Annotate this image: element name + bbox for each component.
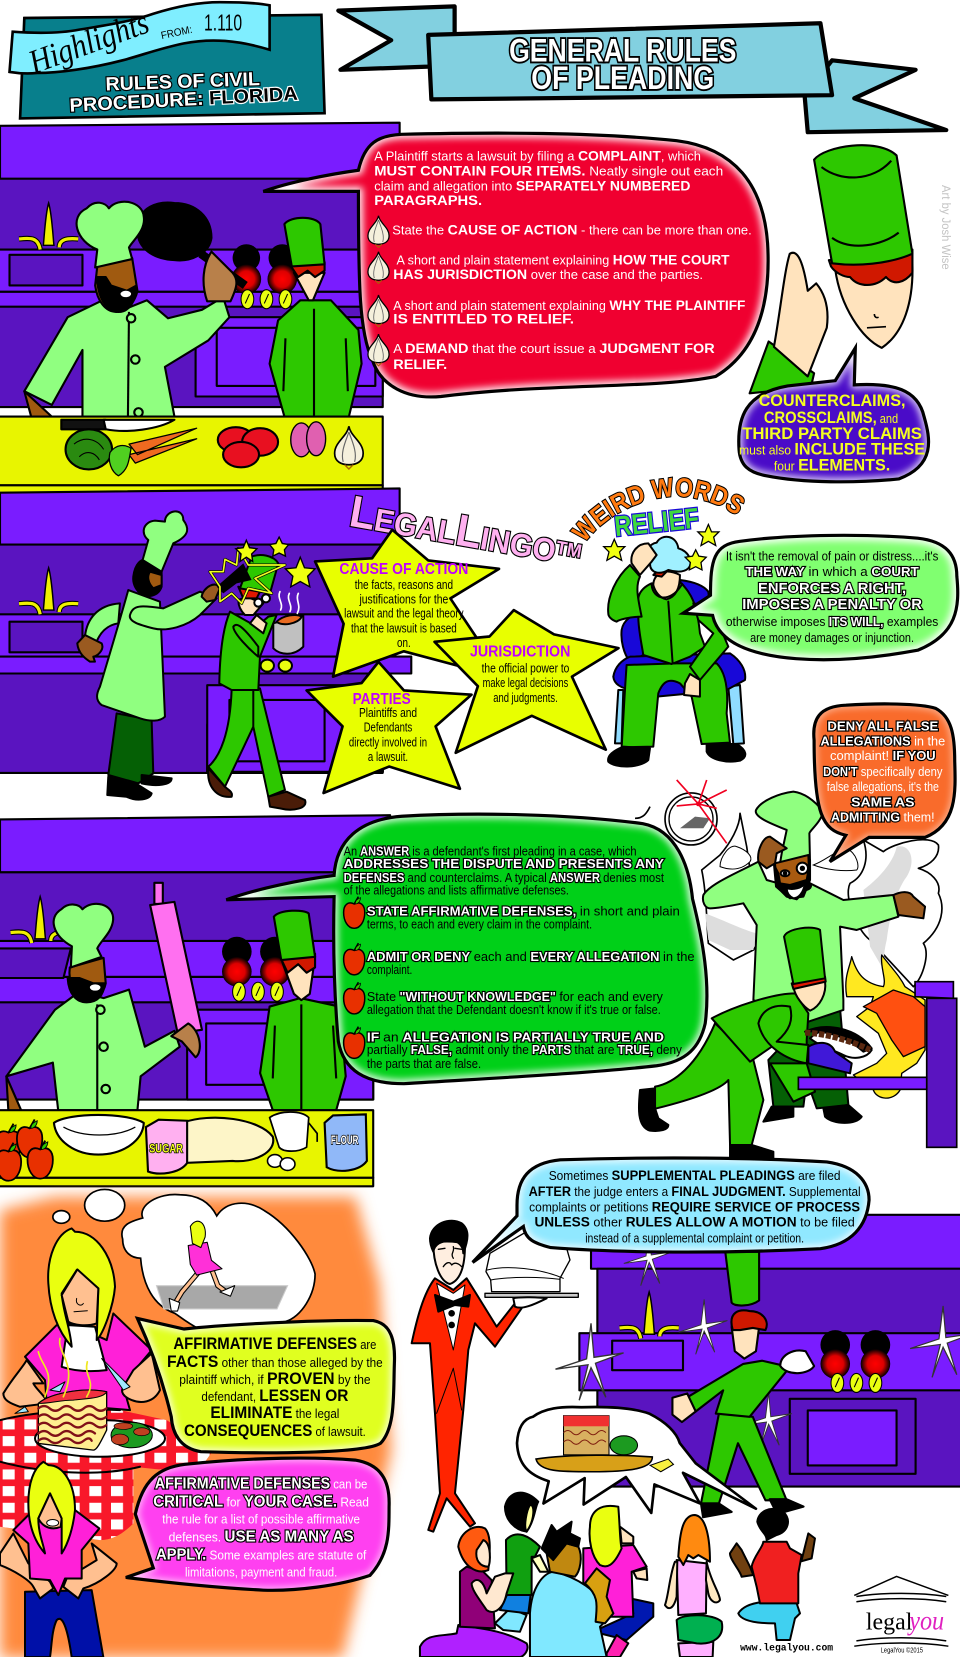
scene: burning oven [635,780,957,1160]
callout: complaint requirements [263,133,768,397]
callout: supplemental pleadings [473,1158,869,1262]
bubble text: DENY ALL FALSE [827,720,938,734]
panel: supplemental pleadings kitchen scene [555,1215,960,1517]
callout: affirmative defenses definition [137,1318,395,1453]
bubble text: instead of a supplemental complaint or petition. [585,1231,804,1245]
bubble text: THIRD PARTY CLAIMS [742,424,922,443]
bubble text: CONSEQUENCES of lawsuit. [184,1421,366,1440]
bubble text: COUNTERCLAIMS, [759,391,906,410]
customers group [420,1493,815,1657]
panel: legal lingo kitchen scene [0,488,411,810]
bubble text: the parts that are false. [367,1057,481,1071]
bubble text: ALLEGATIONS in the [820,734,945,748]
bubble text: IS ENTITLED TO RELIEF. [393,312,574,327]
bubble text: IMPOSES A PENALTY OR [742,597,922,613]
header: rules of civil procedure badge [10,2,325,118]
bubble text: AFFIRMATIVE DEFENSES are [173,1334,376,1353]
bubble text: limitations, payment and fraud. [185,1565,337,1579]
butter [650,1459,673,1472]
logo wordmark: legal [866,1608,913,1635]
salad [610,1436,638,1455]
bubble shape [473,1158,869,1262]
alarm clock [665,780,727,845]
smoke cloud [635,807,942,987]
woman at table [0,1228,213,1657]
steam puffs [720,846,858,871]
customer: green shirt [495,1493,548,1632]
highlights ribbon [10,2,270,73]
bubble text [344,844,695,1071]
logo: legalyou [854,1576,948,1655]
orange backdrop [0,1197,391,1657]
banner body [428,23,832,99]
red onions [291,422,326,457]
badge line 2: PROCEDURE: FLORIDA [69,84,299,117]
bubble text: otherwise imposes ITS WILL, examples [726,615,938,629]
eggs [267,1155,295,1170]
star: cause of action [315,530,499,677]
heading: legal lingo: TM [554,538,583,563]
heading: relief: RELIEF [613,503,700,543]
bubble text: It isn't the removal of pain or distress....it's [726,549,938,563]
lasagna [564,1416,609,1455]
star text: Plaintiffs and [359,706,417,720]
star text: on. [397,636,411,650]
customer: blonde [583,1506,653,1657]
bubble text: terms, to each and every claim in the complaint. [367,917,592,931]
bubble shape [137,1318,395,1453]
bubble text: DON'T specifically deny [823,765,943,779]
callout: deny false allegations [814,704,955,862]
bubble text: IF an ALLEGATION IS PARTIALLY TRUE AND [367,1030,664,1044]
website url: www.legalyou.com [740,1642,833,1654]
customer: orange hair [665,1515,722,1657]
panel: answer kitchen scene [0,815,390,1186]
checked tablecloth [0,1410,213,1540]
bubble text: plaintiff which, if PROVEN by the [179,1369,371,1388]
bubble text: the rule for a list of possible affirmative [162,1513,360,1527]
bubble text: ADDRESSES THE DISPUTE AND PRESENTS ANY [344,857,665,871]
plaintiff chef with pan [24,202,245,419]
bubble text: complaint! IF YOU [830,749,936,763]
bubble text: MUST CONTAIN FOUR ITEMS. Neatly single out each [374,164,723,179]
faucet [620,1292,679,1339]
star text: a lawsuit. [368,750,408,764]
flour bag [325,1114,367,1171]
banner tails [338,6,946,132]
defendant carrying ribs [639,928,872,1160]
plaintiff chef panicking [703,792,925,1123]
bubble text: PARAGRAPHS. [374,193,482,208]
title line 2: OF PLEADING [531,59,714,96]
bubble text: ADMIT OR DENY each and EVERY ALLEGATION in the [367,950,695,964]
faucet [19,203,78,250]
baguette [536,1455,652,1472]
from label: FROM: [160,24,193,42]
star text: the facts, reasons and [355,578,453,592]
knife [61,420,174,431]
thought cloud: running [53,1189,315,1330]
bubble text: complaint. [367,963,412,977]
star heading: JURISDICTION [470,644,570,661]
lasagna plate [35,1338,165,1457]
bubble text: A short and plain statement explaining WHY THE PLAINTIFF [393,298,745,313]
star shape [315,530,499,677]
star text: make legal decisions [483,676,568,690]
bubble text: claim and allegation into SEPARATELY NUMBERED [374,178,690,193]
bubble text: four ELEMENTS. [774,456,890,475]
bubble text: State the CAUSE OF ACTION - there can be more than one. [392,223,752,238]
star text: and judgments. [493,691,558,705]
sparkles [555,1231,960,1447]
fire [846,955,925,1098]
rolling pin [150,883,202,1033]
bubble text: partially FALSE, admit only the PARTS that are TRUE, deny [367,1043,683,1057]
plaintiff chef with rolling pin [6,904,200,1112]
bubble text [153,1476,369,1579]
countertop [0,1110,373,1186]
bubble text [374,149,752,372]
stove burners [232,244,297,294]
pan impact burst [210,548,285,603]
customer: spiky hair [530,1522,613,1657]
bubble text: FACTS other than those alleged by the [167,1352,383,1371]
stove knobs [241,290,292,309]
stove knobs [831,1373,882,1392]
bubble text: complaints or petitions REQUIRE SERVICE OF PROCESS [529,1200,860,1215]
faucet [11,897,70,943]
tomatoes [218,427,278,467]
callout: critical for your case [126,1458,389,1590]
dough [182,1118,273,1163]
measuring cup [270,1112,317,1151]
title line 1: GENERAL RULES [509,31,736,68]
defendant chef [270,218,362,417]
sugar bag [146,1120,187,1174]
bubble text: Sometimes SUPPLEMENTAL PLEADINGS are filed [549,1168,841,1183]
bubble text: AFFIRMATIVE DEFENSES can be [155,1476,367,1493]
callout: answer requirements [226,814,707,1084]
figure: seated defendant [608,537,745,766]
waiter figure [412,1221,578,1532]
bubble text [739,391,925,475]
bubble text: of the allegations and lists affirmative defenses. [344,883,569,897]
bubble text: CROSSCLAIMS, and [764,408,898,427]
bubble shape [263,133,768,397]
star text: that the lawsuit is based [351,621,457,635]
kitchen cabinets [0,815,390,1100]
star text [349,706,427,764]
bubble text: defendant, LESSEN OR [201,1386,348,1405]
bubble text [529,1168,861,1245]
star heading: CAUSE OF ACTION [339,561,468,578]
bubble shape [226,814,707,1084]
logo copyright: LegalYou ©2015 [881,1646,923,1655]
bubble text: An ANSWER is a defendant's first pleading in a case, which [344,844,636,858]
treadmill [156,1286,288,1309]
star text [482,661,569,705]
bubble text: State "WITHOUT KNOWLEDGE" for each and every [367,990,664,1004]
star text [344,578,464,650]
star text: directly involved in [349,735,427,749]
bubble shape [683,535,958,660]
runner [169,1221,235,1311]
sugar bag: SUGAR [149,1142,183,1155]
bubble text: CRITICAL for YOUR CASE. Read [153,1494,369,1511]
bubble shape [126,1458,389,1590]
star shape [435,610,619,753]
highlights script: Highlights [23,4,154,82]
badge line 1: RULES OF CIVIL [105,69,261,95]
panel: affirmative defenses scene [0,1189,391,1657]
callout: relief definition [683,535,958,660]
bubble text: false allegations, it's the [827,780,939,794]
defendant chef with pot [208,555,305,810]
bubble text: A Plaintiff starts a lawsuit by filing a COMPLAINT, which [374,149,701,164]
dizzy stars: seated figure [604,524,719,570]
bubble text: are money damages or injunction. [750,631,914,645]
kitchen cabinets [0,488,411,773]
kitchen cabinets [0,123,400,407]
bubble text: DEFENSES and counterclaims. A typical ANSWER denies most [344,871,664,885]
bubble text: SAME AS [851,796,915,810]
customer: red shirt [730,1509,815,1640]
kitchen cabinets [579,1215,960,1487]
star heading: PARTIES [353,691,411,708]
thought bubble: food [517,1407,756,1513]
woman body [3,1228,160,1413]
faucet [19,568,78,614]
plaintiff chef hitting defendant [77,511,220,800]
garlic bullets [368,216,389,366]
heading: legal lingo: LEGALLINGO [346,487,564,570]
countertop [0,417,383,494]
flour bag: FLOUR [331,1134,359,1147]
bubble text: defenses. USE AS MANY AS [169,1529,354,1546]
mixing bowl [54,1115,144,1155]
panel: complaint kitchen scene [0,123,400,494]
bubble text: ADMITTING them! [831,811,935,825]
logo roof [854,1576,948,1646]
bubble shape [814,704,955,862]
rule number: 1.110 [204,10,242,36]
bubble shape [739,348,929,482]
bubble text: ENFORCES A RIGHT, [758,581,906,597]
bubble text: HAS JURISDICTION over the case and the parties. [393,267,703,282]
oven [798,982,957,1147]
teal plate [20,15,325,118]
artist credit: Art by Josh Wise [939,185,952,270]
defendant cleaning stove [672,1252,814,1517]
star shape [307,662,472,793]
defendant chef [260,911,346,1110]
dizzy stars [236,537,315,587]
bubble text [167,1334,383,1440]
bubble text: A DEMAND that the court issue a JUDGMENT FOR [393,341,715,356]
figure: defendant stop gesture [750,145,913,393]
bubble text: RELIEF. [393,357,447,372]
bubble text: must also INCLUDE THESE [739,440,925,459]
bubble text: STATE AFFIRMATIVE DEFENSES, in short and plain [367,905,680,919]
star text: lawsuit and the legal theory [344,606,464,620]
star: parties [307,662,472,793]
bubble text: allegation that the Defendant doesn't know if it's true or false. [367,1003,661,1017]
bubble text: THE WAY in which a COURT [745,565,919,579]
star: jurisdiction [435,610,619,753]
heading: weird words: WEIRD WORDS [569,476,745,542]
customer: redhead [420,1527,528,1657]
bubble text [726,549,938,645]
stove knobs [233,982,283,1001]
logo accent: you [907,1605,944,1635]
stove burners [222,937,290,986]
callout: counterclaims [739,348,929,482]
star text: Defendants [364,721,412,735]
title banner [338,6,946,132]
bubble text: APPLY. Some examples are statute of [156,1546,367,1563]
counter apples [0,1119,53,1181]
angry woman [0,1462,117,1657]
bubble text: ELIMINATE the legal [210,1403,339,1422]
bubble text [820,720,945,825]
bubble text: A short and plain statement explaining HOW THE COURT [396,252,730,267]
garlic bulb [335,426,363,469]
bubble text: AFTER the judge enters a FINAL JUDGMENT. Supplemental [529,1184,861,1199]
bubble text: UNLESS other RULES ALLOW A MOTION to be filed [534,1214,855,1229]
bubble outline [517,1407,756,1513]
star text: the official power to [482,661,569,675]
star text: justifications for the [359,593,448,607]
carrots [109,428,197,476]
apple bullets [344,897,365,1058]
stove burners [820,1330,890,1379]
cabbage [66,429,112,469]
